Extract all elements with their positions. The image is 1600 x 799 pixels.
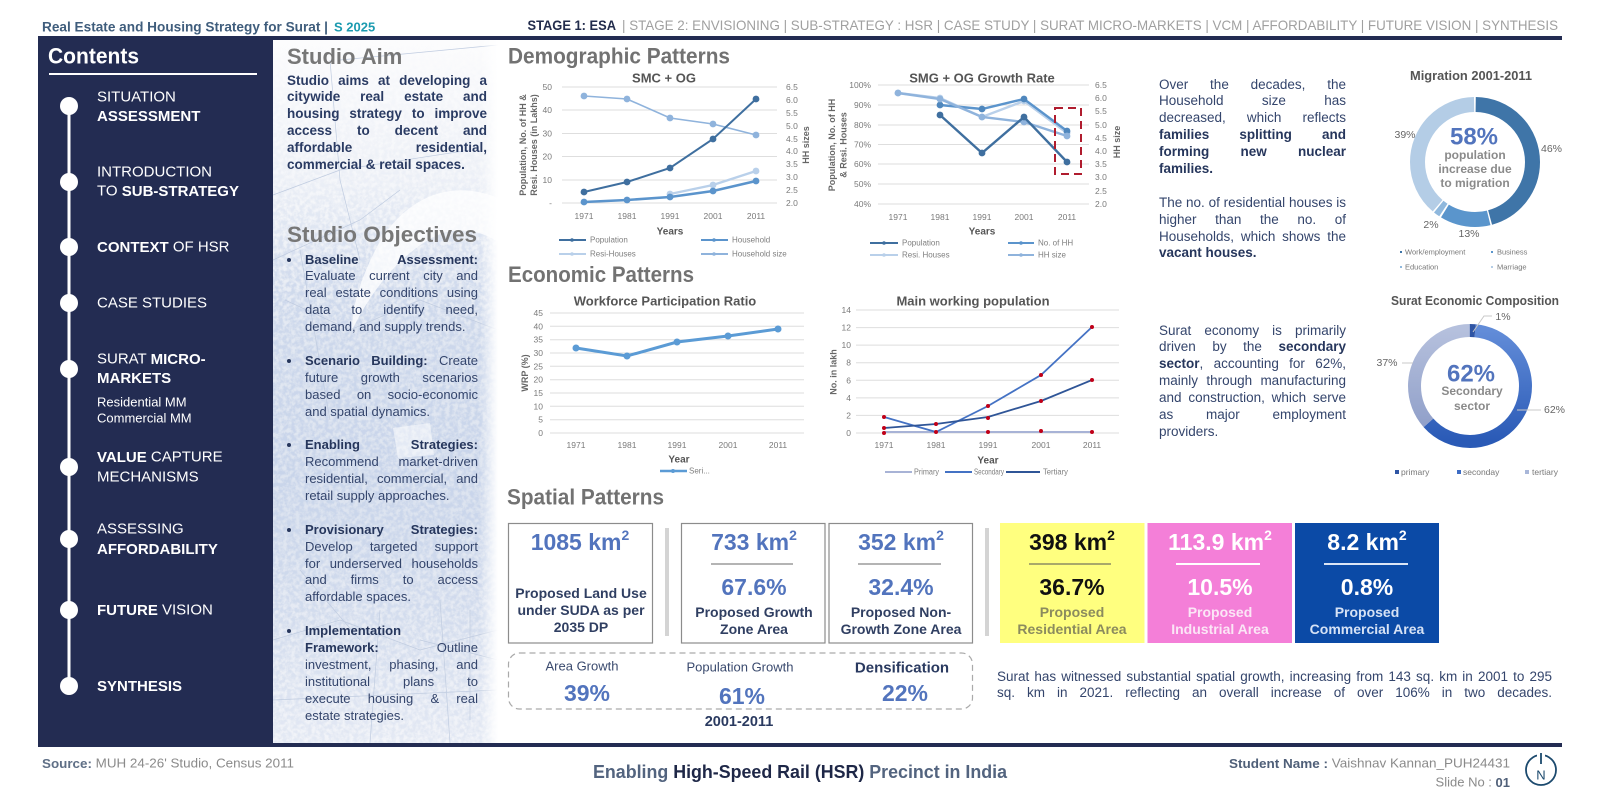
card: proposed land use: under SUDA as per — [517, 602, 645, 618]
donut chart: migration 2001-2011: 13% — [1458, 228, 1480, 240]
card: proposed land use: Proposed Land Use — [515, 585, 647, 601]
contents labels: ASSESSMENT — [97, 108, 200, 124]
chart: SMG + OG growth rate: Resi. Houses — [902, 250, 950, 260]
chart: SMG + OG growth rate: Years — [969, 226, 996, 238]
chart: SMG + OG growth rate: 2.5 — [1095, 186, 1107, 196]
card: proposed residential area — [1000, 523, 1144, 643]
text: studio objectives list: data to identify need, — [305, 302, 478, 317]
text: studio objectives list: Framework: Outline — [305, 640, 478, 655]
chart: SMG + OG growth rate: Population — [902, 238, 940, 248]
chart: SMC + OG: 6.0 — [786, 95, 798, 105]
card: proposed industrial area: Industrial Area — [1171, 621, 1269, 637]
text: studio objectives list: retail supply approaches. — [305, 488, 450, 503]
growth stats dashed box: Area Growth — [546, 658, 618, 674]
card: proposed non-growth zone area: Proposed Non- — [851, 604, 951, 620]
chart: SMG + OG growth rate: 90% — [854, 100, 871, 110]
chart: workforce participation ratio: 2001 — [719, 440, 738, 450]
text: economic commentary: as major employment — [1159, 407, 1346, 422]
text: economic commentary — [1159, 322, 1346, 439]
chart: SMC + OG: 2.5 — [786, 185, 798, 195]
card: proposed commercial area: 2 — [1399, 527, 1407, 543]
text: demographic commentary — [1159, 76, 1346, 260]
card: proposed commercial area — [1295, 523, 1439, 643]
footer student name: Student Name : Vaishnav Kannan_PUH24431 — [1229, 756, 1510, 770]
callout: red dashed box — [1055, 108, 1081, 174]
text: studio objectives list: future growth scenarios — [305, 370, 478, 385]
chart: SMC + OG: 5.0 — [786, 121, 798, 131]
text: studio objectives list — [287, 252, 478, 723]
chart: workforce participation ratio: 0 — [538, 428, 543, 438]
donut chart: surat economic composition: Secondary — [1441, 384, 1503, 398]
chart: main working population: Year — [977, 456, 999, 466]
icon: north arrow: N — [1536, 768, 1546, 782]
chart: main working population — [828, 294, 1119, 476]
contents labels: Residential MM — [97, 394, 187, 410]
contents labels: Commercial MM — [97, 410, 192, 426]
chart: main working population: 6 — [846, 375, 851, 385]
text: studio objectives list: investment, phasing, and — [305, 657, 478, 672]
donut chart: migration 2001-2011: Education — [1405, 262, 1438, 272]
text: economic commentary: and construction, which serve — [1159, 390, 1346, 405]
text: demographic commentary: forming new nuclear — [1159, 144, 1346, 159]
header stage navigation: STAGE 1: ESA — [528, 17, 616, 33]
text: studio objectives list: residential, commercial, and — [305, 471, 478, 486]
chart: workforce participation ratio: 5 — [538, 415, 543, 425]
chart: SMG + OG growth rate: SMG + OG Growth Rate — [909, 70, 1055, 86]
card: proposed commercial area: Commercial Area — [1310, 621, 1425, 637]
donut chart: surat economic composition: tertiary — [1532, 467, 1559, 477]
chart: main working population: 12 — [842, 323, 851, 333]
text: studio objectives list: Evaluate current city and — [305, 268, 478, 283]
contents labels: VALUE CAPTURE — [97, 448, 223, 466]
chart: SMC + OG: Household size — [732, 250, 787, 258]
chart: SMG + OG growth rate: 1971 — [889, 212, 908, 222]
chart: main working population: 1981 — [927, 440, 946, 450]
text: studio aim paragraph: housing strategy to improve — [287, 106, 487, 121]
chart: SMC + OG: Population — [590, 236, 628, 244]
chart: SMC + OG: 1991 — [661, 211, 680, 221]
chart: SMG + OG growth rate: 1991 — [973, 212, 992, 222]
header stage navigation: | STAGE 2: ENVISIONING | SUB-STRATEGY : HSR | CASE STUDY | SURAT MICRO-MARKETS | VCM | AFFORDABILITY | FUTURE VISION | SYNTHESIS — [622, 17, 1558, 33]
text: studio objectives list: and firms to access — [305, 572, 478, 587]
chart: workforce participation ratio: 20 — [534, 375, 543, 385]
chart: SMG + OG growth rate: 3.5 — [1095, 159, 1107, 169]
card: proposed growth zone area: 2 — [789, 527, 797, 543]
card: proposed land use: 1085 km — [531, 529, 622, 555]
chart: SMG + OG growth rate: 70% — [854, 140, 871, 150]
donut chart: migration 2001-2011: 58% — [1450, 124, 1498, 150]
chart: workforce participation ratio: 1981 — [618, 440, 637, 450]
chart: SMC + OG: 4.5 — [786, 134, 798, 144]
card: proposed growth zone area — [682, 524, 825, 643]
contents labels: SITUATION — [97, 88, 176, 106]
text: economic commentary: sector, accounting for 62%, — [1159, 356, 1346, 371]
text: spatial commentary: Surat has witnessed substantial spatial growth, increasing from 143 sq. km in 2001 to 295 — [997, 668, 1552, 684]
header left title: S 2025 — [334, 20, 375, 34]
text: spatial commentary — [997, 668, 1552, 700]
chart: SMG + OG growth rate: 5.0 — [1095, 120, 1107, 130]
donut chart: migration 2001-2011: Work/employment — [1405, 248, 1466, 256]
chart: SMG + OG growth rate: 2.0 — [1095, 199, 1107, 209]
chart: SMC + OG: 3.0 — [786, 172, 798, 182]
card: proposed growth zone area: Zone Area — [720, 621, 788, 637]
chart: SMG + OG growth rate: HH size — [1038, 250, 1067, 260]
donut chart: surat economic composition: Surat Economic Composition — [1391, 294, 1559, 308]
chart: SMG + OG growth rate: 3.0 — [1095, 172, 1107, 182]
heading: studio aim: Studio Aim — [287, 44, 402, 69]
card: proposed industrial area: 113.9 km — [1168, 529, 1264, 555]
card: proposed non-growth zone area: 2 — [936, 527, 944, 543]
card: proposed commercial area: 0.8% — [1341, 574, 1393, 600]
chart: SMC + OG: Resi. Houses (in Lakhs) — [529, 94, 539, 196]
text: studio objectives list: for underserved households — [305, 556, 478, 571]
text: spatial commentary: sq. km in 2021. reflecting an overall increase of over 106% in two decades. — [997, 685, 1552, 700]
text: studio aim paragraph: citywide real estate and — [287, 89, 487, 104]
contents labels: MARKETS — [97, 370, 171, 386]
donut chart: migration 2001-2011: Marriage — [1497, 262, 1527, 272]
chart: workforce participation ratio: 40 — [534, 321, 543, 331]
chart: main working population: 2 — [846, 410, 851, 420]
card: proposed industrial area: Proposed — [1188, 604, 1252, 620]
contents labels: CONTEXT OF HSR — [97, 238, 230, 256]
chart: main working population: 8 — [846, 358, 851, 368]
heading: demographic patterns: Demographic Patterns — [508, 44, 730, 68]
chart: SMC + OG: 30 — [543, 128, 552, 138]
footer source: Source: MUH 24-26' Studio, Census 2011 — [42, 756, 294, 770]
chart: SMG + OG growth rate: 4.0 — [1095, 146, 1107, 156]
contents labels: MECHANISMS — [97, 468, 199, 486]
card: proposed industrial area: 2 — [1264, 527, 1272, 543]
chart: main working population: 2001 — [1032, 440, 1051, 450]
heading: spatial patterns: Spatial Patterns — [507, 484, 664, 510]
donut chart: surat economic composition: 1% — [1495, 311, 1511, 323]
text: economic commentary: Surat economy is primarily — [1159, 322, 1346, 338]
donut chart: surat economic composition: 62% — [1544, 404, 1565, 416]
donut chart: surat economic composition: 62% — [1447, 360, 1495, 388]
text: economic commentary: providers. — [1159, 424, 1218, 439]
donut chart: migration 2001-2011: 46% — [1541, 143, 1562, 155]
text: studio objectives list: Scenario Building: Create — [305, 353, 478, 368]
chart: SMG + OG growth rate: HH size — [1112, 126, 1122, 158]
chart: SMC + OG: Household — [732, 236, 770, 244]
donut chart: surat economic composition: primary — [1401, 467, 1430, 477]
growth stats dashed box: 39% — [564, 680, 610, 706]
chart: SMG + OG growth rate: 1981 — [931, 212, 950, 222]
chart: main working population: No. in lakh — [828, 349, 838, 395]
chart: SMC + OG: SMC + OG — [632, 70, 696, 86]
text: demographic commentary: The no. of residential houses is — [1159, 195, 1346, 210]
card: proposed commercial area: Proposed — [1335, 604, 1399, 620]
chart: SMC + OG: 4.0 — [786, 146, 798, 156]
text: studio objectives list: demand, and supply trends. — [305, 319, 465, 334]
panel: contents sidebar — [38, 38, 273, 747]
growth stats dashed box — [508, 653, 972, 709]
chart: workforce participation ratio: 2011 — [769, 440, 787, 450]
contents labels: FUTURE VISION — [97, 602, 213, 618]
chart: SMC + OG: Years — [657, 226, 684, 238]
chart: SMC + OG: 2.0 — [786, 198, 798, 208]
chart: main working population: Main working population — [896, 294, 1050, 308]
text: studio objectives list: execute housing & real — [305, 691, 478, 706]
chart: main working population: 14 — [842, 305, 851, 315]
contents labels: CASE STUDIES — [97, 294, 207, 312]
chart: SMG + OG growth rate: 60% — [854, 159, 871, 169]
card: proposed residential area: Residential Area — [1017, 621, 1127, 637]
text: studio objectives list: estate strategies. — [305, 708, 404, 723]
chart: main working population: 0 — [846, 428, 851, 438]
text: demographic commentary: decreased, which reflects — [1159, 110, 1346, 125]
chart: SMG + OG growth rate: Population, No. of HH — [827, 99, 837, 191]
chart: SMC + OG: Resi-Houses — [590, 250, 636, 258]
timeline — [60, 97, 78, 695]
footer title: Enabling High-Speed Rail (HSR) Precinct in India — [593, 762, 1008, 782]
chart: SMG + OG growth rate: 40% — [854, 199, 871, 209]
donut chart: surat economic composition: seconday — [1463, 467, 1500, 477]
chart: workforce participation ratio: 30 — [534, 348, 543, 358]
card: proposed industrial area: 10.5% — [1187, 574, 1253, 600]
text: economic commentary: driven by the secondary — [1159, 339, 1346, 354]
donut chart: surat economic composition: 37% — [1376, 357, 1398, 369]
card: proposed growth zone area: Proposed Growth — [695, 604, 813, 620]
chart: workforce participation ratio: 1991 — [668, 440, 687, 450]
chart: SMG + OG growth rate: 5.5 — [1095, 106, 1107, 116]
text: studio objectives list: Implementation — [305, 623, 401, 638]
text: studio objectives list: Provisionary Strategies: — [305, 522, 478, 537]
donut chart: migration 2001-2011 — [1394, 69, 1562, 272]
chart: main working population: 10 — [842, 340, 851, 350]
text: studio aim paragraph: access to decent and — [287, 123, 487, 138]
growth stats dashed box: 61% — [719, 683, 765, 709]
text: studio objectives list: based on socio-economic — [305, 387, 478, 402]
chart: SMC + OG: 2011 — [747, 211, 765, 221]
card: proposed land use — [508, 524, 652, 643]
donut chart: migration 2001-2011: population — [1444, 148, 1506, 162]
chart: workforce participation ratio: 1971 — [567, 440, 586, 450]
donut chart: migration 2001-2011: Business — [1497, 248, 1528, 256]
period label: 2001-2011 — [705, 714, 773, 730]
card: proposed land use: 2035 DP — [554, 619, 608, 635]
chart: SMG + OG growth rate: & Resi. Houses — [838, 112, 848, 178]
text: studio objectives list: real estate conditions using — [305, 285, 478, 300]
text: studio objectives list: institutional plans to — [305, 674, 478, 689]
text: demographic commentary: Over the decades, the — [1159, 76, 1346, 92]
text: demographic commentary: Household size has — [1159, 93, 1346, 108]
contents labels — [97, 88, 239, 694]
contents labels: SYNTHESIS — [97, 678, 182, 694]
contents labels: ASSESSING — [97, 520, 184, 538]
text: studio aim paragraph: affordable residential, — [287, 140, 487, 155]
text: demographic commentary: vacant houses. — [1159, 245, 1257, 260]
donut chart: migration 2001-2011: increase due — [1438, 162, 1512, 176]
text: demographic commentary: families. — [1159, 161, 1213, 176]
chart: SMG + OG growth rate: 80% — [854, 120, 871, 130]
chart: SMC + OG: 1971 — [575, 211, 594, 221]
chart: SMC + OG: 1981 — [618, 211, 637, 221]
text: studio objectives list: Develop targeted support — [305, 539, 478, 554]
chart: SMG + OG growth rate: 100% — [849, 80, 871, 90]
chart: workforce participation ratio: Workforce Participation Ratio — [574, 294, 756, 308]
card: proposed residential area: 36.7% — [1039, 574, 1105, 600]
donut chart: surat economic composition: sector — [1454, 399, 1490, 413]
card: proposed land use: 2 — [622, 527, 630, 543]
donut chart: migration 2001-2011: Migration 2001-2011 — [1410, 69, 1532, 83]
text: studio objectives list: and spatial dynamics. — [305, 404, 430, 419]
text: studio aim paragraph: commercial & retail spaces. — [287, 157, 465, 172]
chart: main working population: Primary — [914, 468, 939, 476]
text: studio aim paragraph: Studio aims at developing a — [287, 72, 487, 88]
chart: SMG + OG growth rate: 6.5 — [1095, 80, 1107, 90]
chart: SMG + OG growth rate: 2011 — [1058, 212, 1076, 222]
chart: SMG + OG growth rate: No. of HH — [1038, 238, 1073, 248]
chart: workforce participation ratio: Seri... — [689, 466, 710, 476]
chart: workforce participation ratio: 15 — [534, 388, 543, 398]
card: proposed non-growth zone area: 352 km — [858, 529, 936, 555]
chart: SMC + OG: 3.5 — [786, 159, 798, 169]
text: studio objectives list: Recommend market-driven — [305, 454, 478, 469]
chart: SMC + OG: 20 — [543, 152, 552, 162]
contents labels: INTRODUCTION — [97, 164, 212, 180]
chart: main working population: 4 — [846, 393, 851, 403]
chart: main working population: Secondary — [974, 468, 1004, 476]
card: proposed non-growth zone area: 32.4% — [868, 574, 934, 600]
card: proposed industrial area — [1148, 523, 1292, 643]
icon: north arrow — [1526, 752, 1556, 785]
chart: workforce participation ratio: WRP (%) — [520, 354, 530, 392]
chart: main working population: 1991 — [979, 440, 998, 450]
text: demographic commentary: families splitting and — [1159, 127, 1346, 142]
donut chart: migration 2001-2011: 2% — [1423, 219, 1439, 231]
header left title: Real Estate and Housing Strategy for Surat | — [42, 20, 328, 34]
chart: SMC + OG: Population, No. of HH & — [518, 94, 528, 196]
text: studio objectives list: Enabling Strategies: — [305, 437, 478, 452]
heading: economic patterns: Economic Patterns — [508, 262, 694, 287]
footer slide number: Slide No : 01 — [1436, 774, 1510, 790]
chart: SMC + OG: 5.5 — [786, 108, 798, 118]
donut chart: surat economic composition — [1376, 294, 1565, 477]
chart: main working population: 1971 — [875, 440, 894, 450]
chart: workforce participation ratio: 35 — [534, 335, 543, 345]
contents labels: TO SUB-STRATEGY — [97, 182, 239, 200]
donut chart: migration 2001-2011: to migration — [1440, 176, 1510, 190]
text: economic commentary: mainly through manufacturing — [1159, 373, 1346, 388]
card: proposed commercial area: 8.2 km — [1327, 529, 1399, 555]
chart: SMC + OG — [518, 70, 811, 258]
heading: studio objectives: Studio Objectives — [287, 222, 477, 247]
donut chart: migration 2001-2011: 39% — [1394, 129, 1416, 141]
growth stats dashed box: 22% — [882, 680, 928, 706]
chart: SMC + OG: 2001 — [704, 211, 723, 221]
text: demographic commentary: Households, which shows the — [1159, 229, 1346, 244]
chart: SMG + OG growth rate: 50% — [854, 179, 871, 189]
card: proposed residential area: 398 km — [1029, 529, 1107, 555]
card: proposed non-growth zone area: Growth Zone Area — [841, 621, 962, 637]
card: proposed non-growth zone area — [829, 524, 972, 643]
chart: SMG + OG growth rate: 4.5 — [1095, 133, 1107, 143]
chart: SMC + OG: 50 — [543, 82, 552, 92]
card: proposed residential area: Proposed — [1040, 604, 1104, 620]
chart: SMC + OG: 40 — [543, 105, 552, 115]
contents labels: AFFORDABILITY — [97, 540, 218, 558]
chart: SMC + OG: - — [549, 198, 552, 208]
chart: main working population: 2011 — [1083, 440, 1101, 450]
chart: workforce participation ratio — [520, 294, 804, 476]
chart: SMG + OG growth rate: 2001 — [1015, 212, 1034, 222]
chart: SMC + OG: HH sizes — [801, 126, 811, 164]
text: studio objectives list: affordable spaces. — [305, 589, 411, 604]
chart: workforce participation ratio: 25 — [534, 361, 543, 371]
chart: SMG + OG growth rate: 6.0 — [1095, 93, 1107, 103]
card: proposed residential area: 2 — [1107, 527, 1115, 543]
chart: SMC + OG: 6.5 — [786, 82, 798, 92]
contents labels: SURAT MICRO- — [97, 350, 206, 368]
card: proposed growth zone area: 733 km — [711, 529, 789, 555]
chart: SMG + OG growth rate — [827, 70, 1122, 260]
text: studio aim paragraph — [287, 72, 488, 172]
growth stats dashed box: Densification — [855, 660, 949, 676]
map background panel — [273, 40, 498, 743]
card: proposed growth zone area: 67.6% — [721, 574, 787, 600]
text: demographic commentary: higher than the no. of — [1159, 212, 1346, 227]
chart: SMC + OG: 10 — [543, 175, 552, 185]
growth stats dashed box: Population Growth — [687, 660, 793, 674]
chart: main working population: Tertiary — [1043, 468, 1068, 476]
text: studio objectives list: Baseline Assessment: — [305, 252, 478, 266]
chart: workforce participation ratio: 45 — [534, 308, 543, 318]
heading: contents: Contents — [48, 44, 139, 68]
chart: workforce participation ratio: 10 — [534, 401, 543, 411]
chart: workforce participation ratio: Year — [668, 454, 690, 466]
